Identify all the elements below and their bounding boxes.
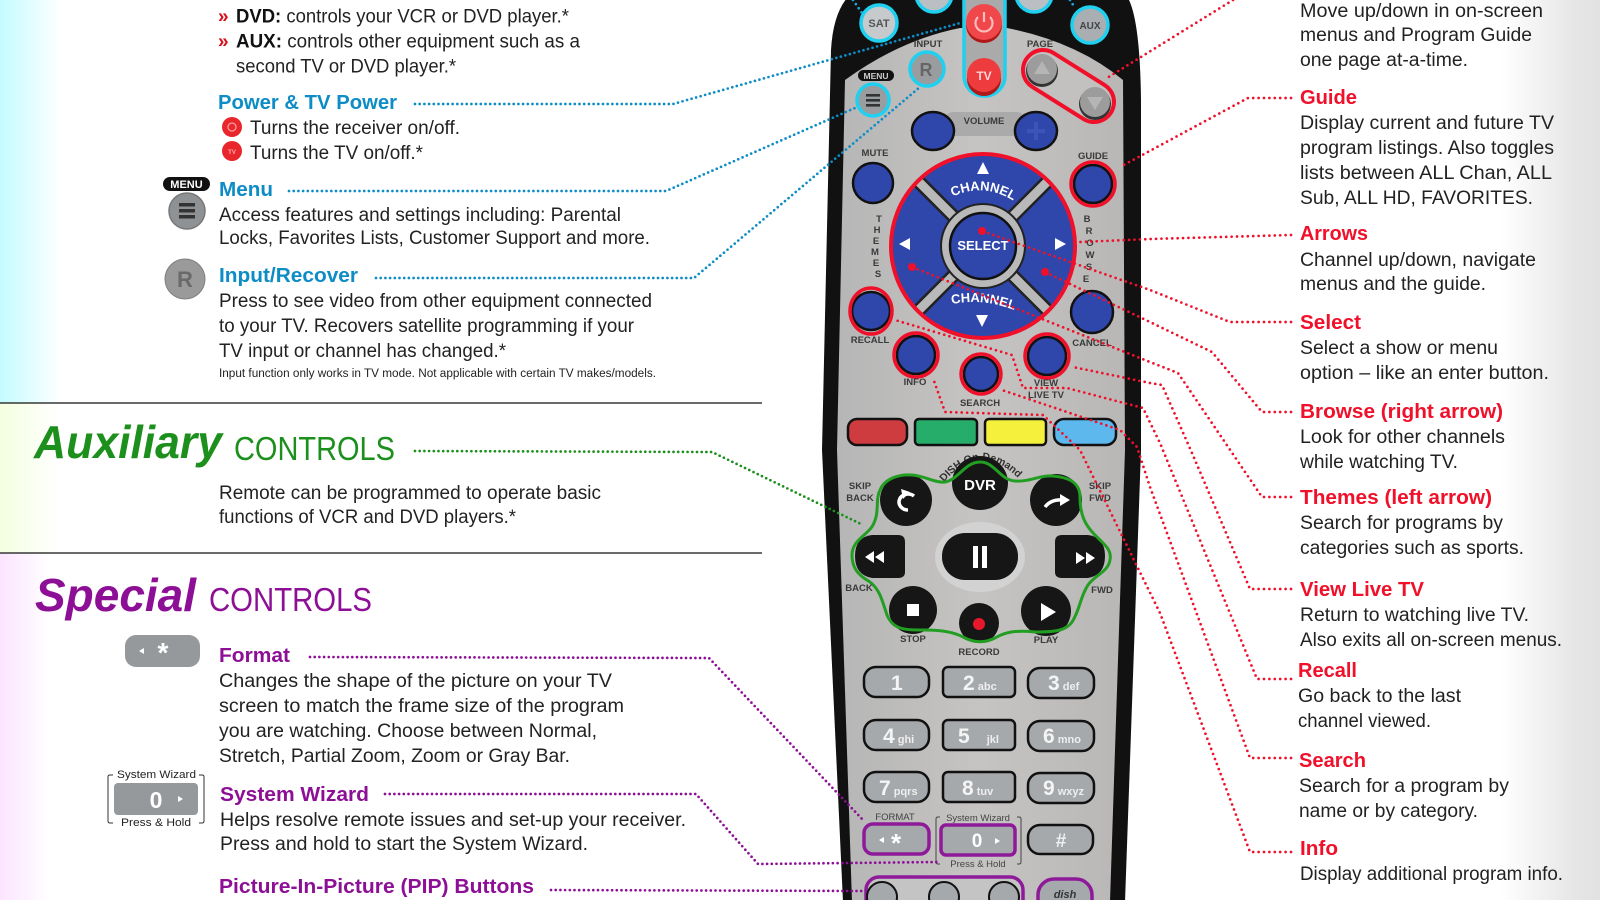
guide button bbox=[1071, 151, 1115, 206]
System Wizard description with icon: Helps resolve remote issues and set-up your receiver. bbox=[220, 810, 686, 831]
number keypad bbox=[864, 667, 1094, 803]
page buttons: PAGE bbox=[1027, 39, 1053, 50]
Search description: Search bbox=[1299, 750, 1366, 772]
callout leaders: special format, wizard, PIP bbox=[310, 657, 938, 891]
Power and TV Power description: Turns the TV on/off.* bbox=[250, 143, 424, 164]
system wizard button: Press & Hold bbox=[950, 859, 1006, 870]
remote face plate bbox=[837, 28, 1125, 900]
themes and browse side labels: E bbox=[1083, 274, 1089, 285]
input and menu buttons bbox=[857, 39, 944, 116]
Select description: Select bbox=[1300, 312, 1361, 334]
directional pad: SELECT bbox=[957, 238, 1009, 253]
remote body bbox=[822, 0, 1141, 900]
top source buttons bbox=[861, 0, 1108, 43]
Power and TV Power description: Turns the receiver on/off. bbox=[250, 118, 460, 139]
number keypad: 3 def bbox=[1048, 672, 1080, 695]
power and TV power buttons bbox=[964, 0, 1005, 96]
Format description with icon: * bbox=[158, 637, 169, 668]
Menu description with icon: Locks, Favorites Lists, Customer Support and more. bbox=[219, 228, 650, 249]
themes and browse side labels bbox=[871, 214, 1095, 285]
View Live TV description: View Live TV bbox=[1300, 579, 1425, 601]
panel: special controls bbox=[35, 569, 686, 898]
Format description with icon: Changes the shape of the picture on your TV bbox=[219, 671, 612, 692]
Input/Recover description with icon bbox=[165, 259, 656, 380]
mute button bbox=[853, 148, 893, 203]
Power and TV Power description bbox=[218, 92, 460, 164]
Page description: one page at-a-time. bbox=[1300, 50, 1468, 71]
Guide description: Display current and future TV bbox=[1300, 113, 1554, 134]
Arrows description: Channel up/down, navigate bbox=[1300, 250, 1536, 271]
Input/Recover description with icon: to your TV. Recovers satellite programming if your bbox=[219, 316, 635, 337]
DVD and AUX mode list: second TV or DVD player.* bbox=[236, 57, 457, 78]
themes and browse side labels: E bbox=[873, 258, 879, 269]
View Live TV description bbox=[1300, 579, 1562, 651]
Page description bbox=[1300, 1, 1543, 71]
Menu description with icon: Menu bbox=[219, 179, 273, 201]
page buttons bbox=[1026, 39, 1111, 120]
heading: Auxiliary Controls bbox=[33, 416, 395, 468]
Themes description: Search for programs by bbox=[1300, 513, 1504, 534]
Select description: Select a show or menu bbox=[1300, 338, 1498, 359]
System Wizard description with icon: Press & Hold bbox=[121, 817, 191, 829]
top source buttons: AUX bbox=[1079, 21, 1101, 32]
Guide description: program listings. Also toggles bbox=[1300, 138, 1554, 159]
number keypad: 5 jkl bbox=[958, 725, 999, 748]
themes and browse side labels: S bbox=[875, 269, 881, 280]
Power and TV Power description: Power & TV Power bbox=[218, 92, 397, 114]
system wizard button bbox=[936, 813, 1021, 870]
themes and browse side labels: H bbox=[874, 225, 881, 236]
Arrows description: menus and the guide. bbox=[1300, 274, 1486, 295]
volume buttons bbox=[912, 112, 1057, 150]
Menu description with icon: MENU bbox=[170, 179, 203, 191]
system wizard button: System Wizard bbox=[946, 813, 1010, 824]
Power and TV Power description: TV bbox=[228, 150, 236, 156]
Recall description: Recall bbox=[1298, 660, 1357, 682]
Input/Recover description with icon: Press to see video from other equipment connected bbox=[219, 291, 652, 312]
PIP heading: Picture-In-Picture (PIP) Buttons bbox=[219, 876, 534, 898]
auxiliary description: Remote can be programmed to operate basic bbox=[219, 483, 601, 504]
number keypad: 7 pqrs bbox=[879, 777, 918, 800]
System Wizard description with icon: 0 bbox=[150, 787, 162, 813]
System Wizard description with icon bbox=[108, 769, 686, 855]
number keypad: 2 abc bbox=[963, 672, 997, 695]
recall, cancel, info, search, view live TV buttons bbox=[850, 288, 1113, 409]
Input/Recover description with icon: R bbox=[177, 267, 193, 292]
DVR control group: FWD bbox=[1089, 493, 1111, 504]
System Wizard description with icon: System Wizard bbox=[117, 769, 196, 781]
Recall description: channel viewed. bbox=[1298, 711, 1431, 732]
recall, cancel, info, search, view live TV buttons: INFO bbox=[904, 377, 926, 388]
format button: FORMAT bbox=[875, 812, 915, 823]
format button: * bbox=[891, 828, 902, 858]
Format description with icon: Stretch, Partial Zoom, Zoom or Gray Bar. bbox=[219, 746, 570, 767]
themes and browse side labels: O bbox=[1086, 238, 1094, 249]
Menu description with icon: Access features and settings including: Parental bbox=[219, 205, 621, 226]
volume buttons: VOLUME bbox=[964, 116, 1004, 127]
Themes description: categories such as sports. bbox=[1300, 538, 1524, 559]
themes and browse side labels: W bbox=[1086, 250, 1095, 261]
DVR control group: BACK bbox=[846, 493, 874, 504]
DVR control group: DVR bbox=[964, 477, 996, 494]
View Live TV description: Return to watching live TV. bbox=[1300, 605, 1529, 626]
Arrows description bbox=[1300, 223, 1536, 295]
Browse description: Browse (right arrow) bbox=[1300, 401, 1503, 423]
Page description: Move up/down in on-screen bbox=[1300, 1, 1543, 22]
number keypad: 4 ghi bbox=[883, 725, 914, 748]
Themes description: Themes (left arrow) bbox=[1300, 487, 1492, 509]
Guide description bbox=[1300, 87, 1554, 209]
Guide description: Guide bbox=[1300, 87, 1357, 109]
Search description: name or by category. bbox=[1299, 801, 1478, 822]
number keypad: 1 bbox=[891, 672, 903, 695]
recall, cancel, info, search, view live TV buttons: SEARCH bbox=[960, 398, 1000, 409]
directional pad: CHANNEL bbox=[951, 181, 1014, 200]
directional pad: CHANNEL bbox=[952, 293, 1014, 310]
themes and browse side labels: E bbox=[873, 236, 879, 247]
Guide description: Sub, ALL HD, FAVORITES. bbox=[1300, 188, 1533, 209]
Recall description bbox=[1298, 660, 1462, 732]
Info description: Display additional program info. bbox=[1300, 864, 1563, 885]
mute button: MUTE bbox=[862, 148, 888, 159]
auxiliary description: functions of VCR and DVD players.* bbox=[219, 507, 517, 528]
recall, cancel, info, search, view live TV buttons: CANCEL bbox=[1072, 338, 1112, 349]
DVD and AUX mode list: » bbox=[218, 7, 229, 28]
System Wizard description with icon: System Wizard bbox=[220, 784, 369, 806]
recall, cancel, info, search, view live TV buttons: VIEW bbox=[1034, 378, 1058, 389]
DVD and AUX mode list bbox=[218, 7, 580, 78]
recall, cancel, info, search, view live TV buttons: RECALL bbox=[851, 335, 889, 346]
DVR control group: SKIP bbox=[849, 481, 872, 492]
guide button: GUIDE bbox=[1078, 151, 1108, 162]
DVD and AUX mode list: AUX: controls other equipment such as a bbox=[236, 32, 580, 53]
DVD and AUX mode list: DVD: controls your VCR or DVD player.* bbox=[236, 7, 570, 28]
Browse description: Look for other channels bbox=[1300, 427, 1505, 448]
heading: Special Controls bbox=[35, 569, 372, 621]
DVR control group bbox=[845, 452, 1113, 658]
themes and browse side labels: B bbox=[1084, 214, 1091, 225]
Page description: menus and Program Guide bbox=[1300, 25, 1532, 46]
remote control bbox=[822, 0, 1141, 900]
themes and browse side labels: M bbox=[871, 247, 879, 258]
Guide description: lists between ALL Chan, ALL bbox=[1300, 163, 1552, 184]
DVR control group: BACK bbox=[845, 583, 873, 594]
Format description with icon: Format bbox=[219, 645, 290, 667]
panel: right column control descriptions bbox=[1298, 1, 1563, 885]
DVR control group: FWD bbox=[1091, 585, 1113, 596]
number keypad: 8 tuv bbox=[962, 777, 994, 800]
power and TV power buttons: TV bbox=[976, 69, 992, 83]
system wizard button: 0 bbox=[972, 831, 982, 852]
panel: auxiliary controls bbox=[33, 416, 601, 528]
heading: Auxiliary Controls: Auxiliary bbox=[33, 416, 224, 468]
DVR control group: RECORD bbox=[958, 647, 1000, 658]
themes and browse side labels: T bbox=[876, 214, 882, 225]
callout leader: auxiliary bbox=[415, 451, 863, 525]
Format description with icon bbox=[125, 635, 624, 767]
Input/Recover description with icon: TV input or channel has changed.* bbox=[219, 341, 507, 362]
DVD and AUX mode list: » bbox=[218, 32, 229, 53]
View Live TV description: Also exits all on-screen menus. bbox=[1300, 630, 1562, 651]
Browse description: while watching TV. bbox=[1299, 452, 1458, 473]
heading: Auxiliary Controls: CONTROLS bbox=[234, 430, 395, 467]
format button bbox=[864, 812, 929, 858]
auxiliary description bbox=[219, 483, 601, 528]
Arrows description: Arrows bbox=[1300, 223, 1368, 245]
number keypad: 6 mno bbox=[1043, 725, 1081, 748]
DVR control group: SKIP bbox=[1089, 481, 1112, 492]
Info description bbox=[1300, 838, 1563, 885]
Themes description bbox=[1300, 487, 1524, 559]
callout leaders: red right-side controls bbox=[895, 0, 1291, 852]
directional pad bbox=[889, 152, 1077, 340]
DVR control group: DISH On Demand bbox=[939, 452, 1023, 481]
colored buttons bbox=[848, 419, 1116, 445]
heading: Special Controls: CONTROLS bbox=[209, 581, 372, 618]
Search description bbox=[1299, 750, 1510, 822]
themes and browse side labels: S bbox=[1086, 262, 1092, 273]
input and menu buttons: MENU bbox=[863, 71, 889, 81]
recall, cancel, info, search, view live TV buttons: LIVE TV bbox=[1028, 390, 1065, 401]
callout leaders: blue power, menu, input bbox=[289, 0, 1075, 278]
Format description with icon: you are watching. Choose between Normal, bbox=[219, 721, 597, 742]
DVR control group: PLAY bbox=[1034, 635, 1059, 646]
themes and browse side labels: R bbox=[1086, 226, 1093, 237]
pound symbol: # bbox=[1056, 831, 1067, 852]
heading: Special Controls: Special bbox=[35, 569, 197, 621]
Search description: Search for a program by bbox=[1299, 776, 1510, 797]
Info description: Info bbox=[1300, 838, 1338, 860]
System Wizard description with icon: Press and hold to start the System Wizard. bbox=[220, 834, 588, 855]
PIP buttons bbox=[866, 877, 1092, 900]
Select description: option – like an enter button. bbox=[1300, 363, 1549, 384]
top source buttons: SAT bbox=[868, 18, 890, 30]
Recall description: Go back to the last bbox=[1298, 686, 1462, 707]
panel: basic controls (left top) bbox=[163, 7, 656, 380]
DVR control group: STOP bbox=[900, 634, 927, 645]
Input/Recover description with icon: Input/Recover bbox=[219, 265, 358, 287]
input and menu buttons: R bbox=[920, 60, 932, 80]
number keypad: 9 wxyz bbox=[1043, 777, 1085, 800]
Menu description with icon bbox=[163, 177, 650, 249]
input and menu buttons: INPUT bbox=[914, 39, 942, 50]
Format description with icon: screen to match the frame size of the program bbox=[219, 696, 624, 717]
Select description bbox=[1300, 312, 1549, 384]
Browse description bbox=[1299, 401, 1505, 473]
Input/Recover description with icon: Input function only works in TV mode. Not applicable with certain TV makes/models. bbox=[219, 368, 656, 380]
pound key bbox=[1028, 825, 1093, 854]
